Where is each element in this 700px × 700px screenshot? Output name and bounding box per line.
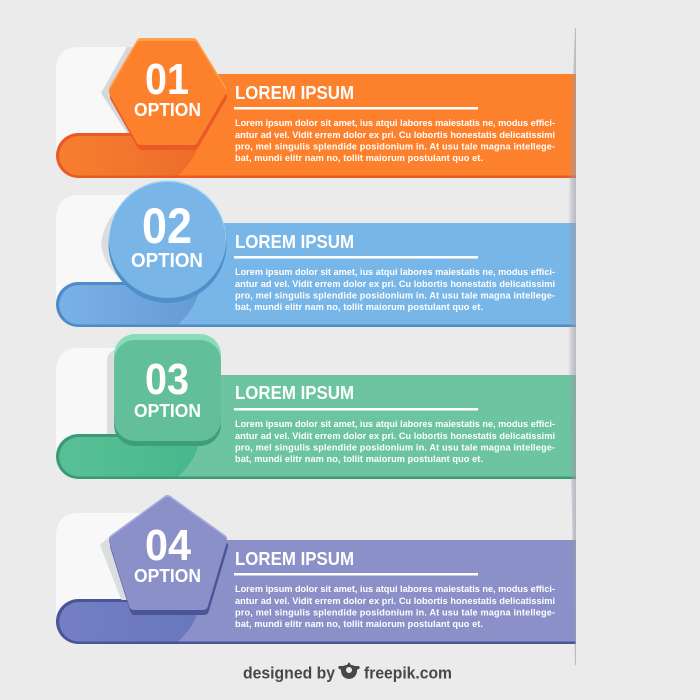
hexagon badge 01 xyxy=(114,43,222,145)
text block 02: LOREM IPSUM xyxy=(235,232,354,252)
rounded square badge 03 xyxy=(114,334,221,446)
text block 01: pro, mel singulis splendide posidonium in. At usu tale magna intellege- xyxy=(235,142,555,152)
number 03: 03 xyxy=(145,355,189,404)
pill outline 01 xyxy=(56,133,576,178)
white card 01 xyxy=(56,47,180,155)
text block 02: bat, mundi elitr nam no, tollit maiorum postulant quo et. xyxy=(235,302,483,312)
band face 02 xyxy=(178,223,576,324)
pill 03 xyxy=(59,437,205,476)
pill 04 xyxy=(59,602,205,642)
number 02: 02 xyxy=(142,198,192,254)
band face 01 xyxy=(178,74,576,176)
text block 01: Lorem ipsum dolor sit amet, ius atqui labores maiestatis ne, modus effici- xyxy=(235,118,555,128)
icon shadow 03 xyxy=(107,350,150,434)
pill outline 03 xyxy=(56,434,576,479)
icon shadow 04 xyxy=(101,535,135,599)
text block 01: bat, mundi elitr nam no, tollit maiorum postulant quo et. xyxy=(235,153,483,163)
circle badge 02 xyxy=(108,180,226,303)
panel: option 04 xyxy=(56,500,576,644)
text block 04: pro, mel singulis splendide posidonium in. At usu tale magna intellege- xyxy=(235,608,555,618)
pill outline 02 xyxy=(56,282,576,327)
pentagon badge 04 xyxy=(114,500,223,610)
band face 03 xyxy=(178,375,576,476)
text block 03: antur ad vel. Vidit errem dolor ex pri. Cu lobortis honestatis delicatissimi xyxy=(235,431,555,441)
panel: option 01 xyxy=(56,43,576,178)
text block 02 xyxy=(234,232,555,312)
text block 01: LOREM IPSUM xyxy=(235,83,354,103)
footer credit xyxy=(243,662,452,682)
text block 03: pro, mel singulis splendide posidonium in. At usu tale magna intellege- xyxy=(235,442,555,452)
text block 04: antur ad vel. Vidit errem dolor ex pri. Cu lobortis honestatis delicatissimi xyxy=(235,596,555,606)
footer credit: freepik.com xyxy=(364,664,452,682)
pill 02 xyxy=(59,285,205,324)
text block 04: LOREM IPSUM xyxy=(235,549,354,569)
pill outline 04 xyxy=(56,599,576,644)
label option 03: OPTION xyxy=(134,401,201,421)
number 04: 04 xyxy=(145,521,191,570)
text block 02: pro, mel singulis splendide posidonium in. At usu tale magna intellege- xyxy=(235,290,555,300)
icon shadow 01 xyxy=(101,47,170,133)
text block 04: Lorem ipsum dolor sit amet, ius atqui labores maiestatis ne, modus effici- xyxy=(235,584,555,594)
label option 02: OPTION xyxy=(131,250,203,272)
panel: option 03 xyxy=(56,334,576,479)
white card 02 xyxy=(56,195,180,304)
text block 04 xyxy=(234,549,555,629)
text block 01: antur ad vel. Vidit errem dolor ex pri. Cu lobortis honestatis delicatissimi xyxy=(235,130,555,140)
icon: freepik mascot xyxy=(338,662,360,679)
number 01: 01 xyxy=(145,55,189,104)
icon shadow 02 xyxy=(101,199,170,281)
text block 03: bat, mundi elitr nam no, tollit maiorum postulant quo et. xyxy=(235,454,483,464)
text block 02: antur ad vel. Vidit errem dolor ex pri. Cu lobortis honestatis delicatissimi xyxy=(235,279,555,289)
pill 01 xyxy=(59,136,205,176)
panel: option 02 xyxy=(56,180,576,327)
white card 04 xyxy=(56,513,180,621)
band face 04 xyxy=(178,540,576,642)
text block 03 xyxy=(234,383,555,464)
footer credit: designed by xyxy=(243,664,336,682)
text block 04: bat, mundi elitr nam no, tollit maiorum postulant quo et. xyxy=(235,619,483,629)
text block 01 xyxy=(234,83,555,163)
text block 03: LOREM IPSUM xyxy=(235,383,354,403)
label option 01: OPTION xyxy=(134,100,201,120)
white card 03 xyxy=(56,348,180,456)
label option 04: OPTION xyxy=(134,566,201,586)
text block 02: Lorem ipsum dolor sit amet, ius atqui labores maiestatis ne, modus effici- xyxy=(235,267,555,277)
text block 03: Lorem ipsum dolor sit amet, ius atqui labores maiestatis ne, modus effici- xyxy=(235,419,555,429)
